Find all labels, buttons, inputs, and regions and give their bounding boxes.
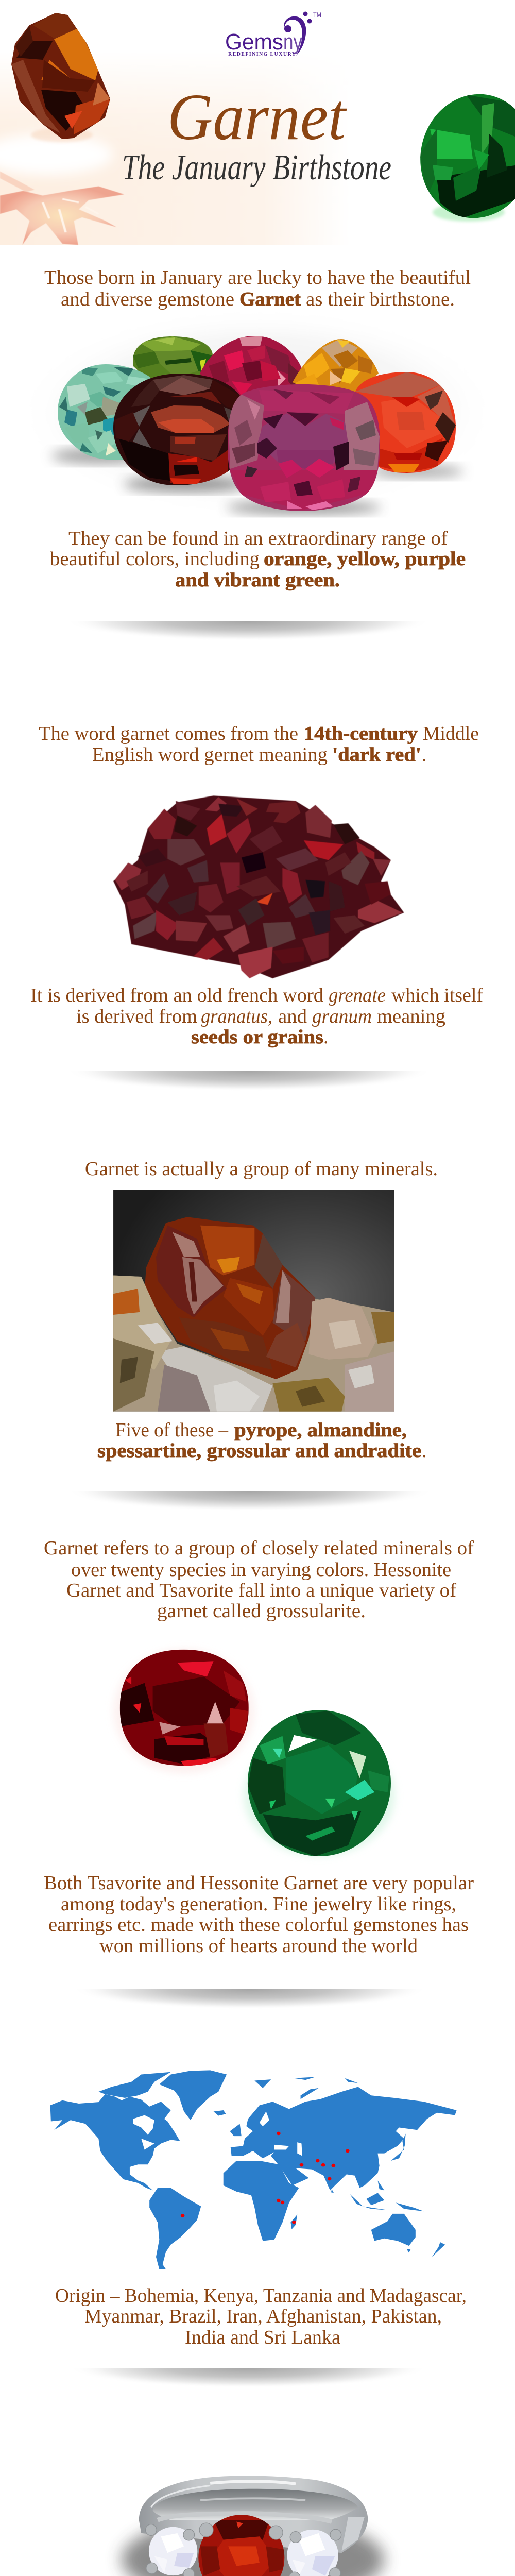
text block: popularity: earrings etc. made with these colorful gemstones has: [48, 1914, 469, 1936]
text block: group of minerals: Garnet is actually a group of many minerals.: [85, 1158, 438, 1180]
text block: five species: pyrope, almandine,: [234, 1419, 407, 1441]
text block: word origin: [39, 723, 479, 766]
stone: centre garnet: [197, 2514, 286, 2576]
text block: related minerals: over twenty species in varying colors. Hessonite: [71, 1559, 451, 1581]
text block: word origin: 'dark red': [332, 744, 421, 766]
text block: related minerals: [44, 1537, 474, 1622]
text block: derivation: .: [323, 1026, 329, 1048]
text block: colors: [50, 528, 466, 591]
text block: origin: Origin – Bohemia, Kenya, Tanzania and Madagascar,: [55, 2285, 467, 2307]
image: hessonite red cushion gem: [113, 1649, 254, 1773]
divider shadow 2: [66, 1071, 433, 1091]
gem: green: [133, 336, 213, 378]
title: Garnet: [167, 80, 347, 154]
text block: popularity: Both Tsavorite and Hessonite Garnet are very popular: [44, 1872, 474, 1894]
text block: word origin: 14th-century: [304, 723, 418, 744]
text block: word origin: English word gernet meaning: [92, 744, 328, 766]
gem: magenta cushion: [227, 381, 381, 513]
text block: five species: [97, 1419, 426, 1462]
image: cluster of coloured garnets: [47, 336, 466, 517]
text block: related minerals: garnet called grossularite.: [157, 1600, 366, 1622]
text block: intro: [44, 267, 471, 310]
world map: [50, 2070, 457, 2269]
image: garnet three-stone ring: [122, 2476, 384, 2576]
gem: orange: [293, 339, 379, 392]
text block: origin: Myanmar, Brazil, Iran, Afghanistan, Pakistan,: [84, 2306, 442, 2327]
gem: dark almandine: [113, 374, 240, 485]
divider shadow 5: [69, 2368, 427, 2388]
text block: derivation: granatus,: [201, 1006, 272, 1027]
text block: derivation: granum: [312, 1006, 372, 1027]
icon: tsavorite green gem top right: [420, 94, 515, 223]
stone: left diamond: [148, 2527, 199, 2576]
image: pile of rough garnet: [113, 795, 404, 978]
gem: crimson: [200, 336, 302, 396]
logo: Gemsny top: REDEFINING LUXURY: [228, 52, 296, 57]
continents: [50, 2070, 457, 2269]
text block: colors: They can be found in an extraordinary range of: [68, 528, 448, 549]
text block: derivation: grenate: [329, 985, 386, 1006]
text block: related minerals: Garnet and Tsavorite fall into a unique variety of: [66, 1580, 456, 1601]
text block: related minerals: Garnet refers to a group of closely related minerals of: [44, 1537, 474, 1559]
text block: colors: orange, yellow, purple: [264, 548, 466, 570]
text block: derivation: It is derived from an old french word: [30, 985, 323, 1006]
inland water: [133, 2111, 302, 2156]
text block: derivation: meaning: [377, 1006, 445, 1027]
image: tsavorite green round gem: [244, 1709, 395, 1858]
subtitle: The January Birthstone: [122, 148, 391, 188]
gem: teal: [58, 364, 151, 460]
text block: word origin: .: [422, 744, 426, 766]
text block: intro: Garnet: [239, 289, 301, 310]
hero background wash: [0, 52, 350, 245]
text block: popularity: among today's generation. Fine jewelry like rings,: [61, 1893, 456, 1915]
text block: word origin: Middle: [423, 723, 479, 744]
logo: Gemsny top: Gems: [225, 29, 283, 55]
text block: intro: Those born in January are lucky to have the beautiful: [44, 267, 471, 289]
text block: popularity: won millions of hearts around the world: [99, 1935, 418, 1957]
text block: derivation: [30, 985, 483, 1048]
text block: colors: beautiful colors, including: [50, 548, 260, 570]
logo: Gemsny top: ny: [283, 29, 302, 55]
divider shadow 3: [66, 1491, 433, 1511]
text block: word origin: The word garnet comes from the: [39, 723, 298, 744]
logo: Gemsny top: TM: [313, 11, 321, 19]
text block: derivation: and: [278, 1006, 307, 1027]
text block: five species: spessartine, grossular and andradite: [97, 1440, 421, 1462]
logo: Gemsny top: [225, 11, 321, 57]
text block: derivation: which itself: [391, 985, 483, 1006]
divider shadow 1: [66, 621, 431, 641]
text block: origin: India and Sri Lanka: [185, 2327, 340, 2348]
leaf decoration: [0, 172, 124, 245]
text block: five species: .: [422, 1440, 426, 1462]
stone: right diamond: [286, 2528, 340, 2576]
gem: red orange: [355, 372, 456, 473]
text block: colors: and vibrant green.: [175, 569, 340, 591]
text block: intro: as their birthstone.: [306, 289, 455, 310]
prongs: [146, 2523, 341, 2576]
text block: five species: Five of these –: [115, 1419, 229, 1441]
icon: hessonite garnet gem top left: [11, 13, 110, 143]
divider shadow 4: [72, 1989, 427, 2009]
text block: origin: [55, 2285, 467, 2348]
image: garnet crystal on rock: [113, 1190, 394, 1412]
text block: popularity: [44, 1872, 474, 1957]
text block: intro: and diverse gemstone: [61, 289, 234, 310]
origin markers: [181, 2132, 350, 2224]
text block: derivation: seeds or grains: [191, 1026, 323, 1048]
text block: derivation: is derived from: [76, 1006, 197, 1027]
